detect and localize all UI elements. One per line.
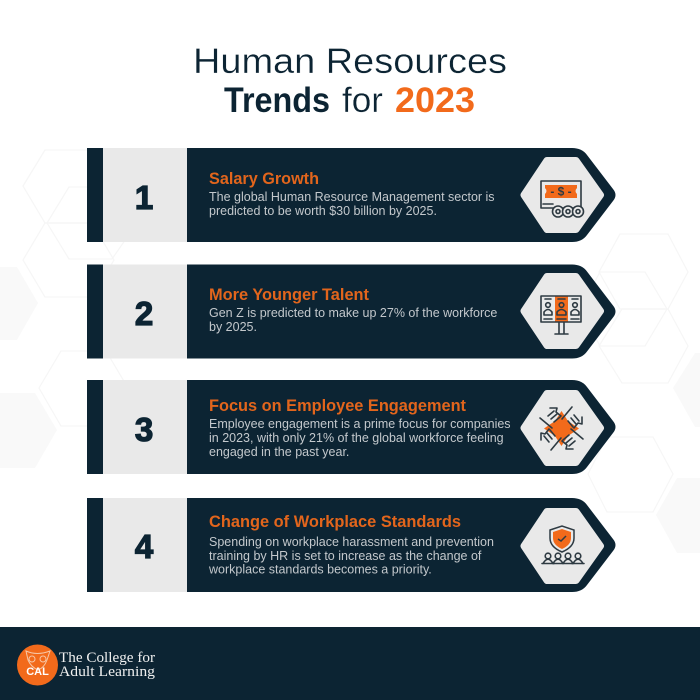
number 4: 4 bbox=[135, 528, 154, 565]
title: Trends bbox=[224, 81, 330, 120]
text: more younger talent bbox=[209, 306, 497, 334]
heading: change of workplace standards: Change of Workplace Standards bbox=[209, 513, 461, 531]
title: for bbox=[342, 81, 383, 120]
text: employee engagement: engaged in the past year. bbox=[209, 445, 349, 459]
number 3: 3 bbox=[135, 411, 153, 448]
text: salary growth: predicted to be worth $30 billion by 2025. bbox=[209, 204, 437, 218]
icon: joined hands bbox=[540, 407, 583, 450]
icon: shield and team bbox=[542, 526, 584, 564]
title: 2023 bbox=[395, 81, 475, 120]
logo text: Adult Learning bbox=[59, 664, 156, 680]
logo: owl badge bbox=[17, 644, 58, 686]
icon: money and coins bbox=[541, 181, 584, 217]
text: workplace standards: workplace standards becomes a priority. bbox=[208, 562, 432, 576]
number 1: 1 bbox=[135, 179, 153, 216]
text: workplace standards: Spending on workplace harassment and prevention bbox=[209, 535, 494, 549]
text: more younger talent: Gen Z is predicted to make up 27% of the workforce bbox=[209, 306, 497, 320]
number 2: 2 bbox=[135, 295, 153, 332]
panel: change of workplace standards bbox=[87, 498, 616, 592]
heading: more younger talent: More Younger Talent bbox=[209, 286, 370, 304]
logo text: The College for bbox=[59, 650, 155, 666]
text: employee engagement bbox=[209, 417, 511, 459]
title: Human Resources bbox=[193, 42, 507, 81]
logo text bbox=[59, 650, 156, 680]
heading: focus on employee engagement: Focus on Employee Engagement bbox=[209, 397, 467, 415]
icon: monitor with candidates bbox=[541, 296, 581, 334]
heading: salary growth: Salary Growth bbox=[209, 170, 319, 188]
text: employee engagement: Employee engagement is a prime focus for companies bbox=[209, 417, 511, 431]
text: more younger talent: by 2025. bbox=[209, 320, 257, 334]
text: salary growth bbox=[209, 190, 495, 218]
footer band bbox=[0, 627, 700, 700]
icon: money and coins: - $ - bbox=[550, 184, 572, 198]
text: workplace standards: training by HR is set to increase as the change of bbox=[209, 549, 482, 563]
title bbox=[193, 42, 507, 120]
text: workplace standards bbox=[208, 535, 494, 576]
logo: owl badge: CAL bbox=[26, 666, 49, 678]
panel: more younger talent bbox=[87, 264, 616, 358]
panel: focus on employee engagement bbox=[87, 380, 616, 474]
text: salary growth: The global Human Resource Management sector is bbox=[209, 190, 495, 204]
panel: salary growth bbox=[87, 148, 616, 242]
text: employee engagement: in 2023, with only 21% of the global workforce feeling bbox=[209, 431, 504, 445]
